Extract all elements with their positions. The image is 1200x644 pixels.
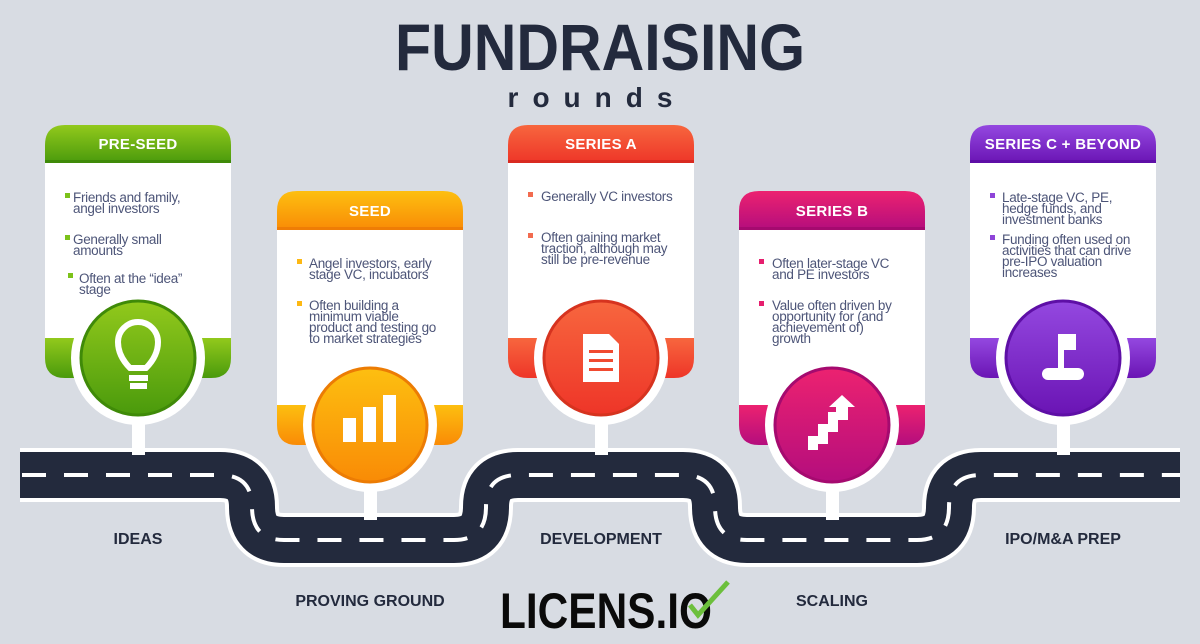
panel: series c + beyond: activities that can drive (1002, 243, 1131, 258)
panel: series a: traction, although may (541, 241, 668, 256)
panel: series c + beyond: Funding often used on (1002, 232, 1130, 247)
panel: series b: Value often driven by (772, 298, 892, 313)
stage labels (114, 531, 1121, 610)
panel: series c + beyond: investment banks (1002, 212, 1103, 227)
panel: series b: and PE investors (772, 267, 870, 282)
stage labels: DEVELOPMENT (540, 531, 662, 548)
icon: flag (1042, 334, 1084, 380)
logo: LICENS.IO (500, 583, 712, 639)
panel: pre-seed: amounts (73, 243, 123, 258)
stage labels: PROVING GROUND (295, 593, 445, 610)
panel: series b: achievement of) (772, 320, 864, 335)
panel: series c + beyond: Late-stage VC, PE, (1002, 190, 1112, 205)
panel: pre-seed: Generally small (73, 232, 162, 247)
icon: lightbulb (118, 322, 158, 386)
panel: seed: stage VC, incubators (309, 267, 429, 282)
panel: pre-seed: stage (79, 282, 111, 297)
panel: series a: Often gaining market (541, 230, 661, 245)
panel: series a (508, 125, 694, 455)
panel: pre-seed: angel investors (73, 201, 160, 216)
panel: series c + beyond: hedge funds, and (1002, 201, 1102, 216)
panel: pre-seed: Often at the “idea” (79, 271, 182, 286)
icon: stairs arrow (808, 395, 855, 450)
panel: series b: SERIES B (796, 203, 868, 220)
panel: seed: SEED (349, 203, 391, 220)
road (20, 475, 1180, 540)
title (395, 10, 805, 113)
icon: bar chart (343, 395, 396, 442)
panel: series a: SERIES A (565, 136, 637, 153)
stage labels: SCALING (796, 593, 868, 610)
panel: series a: still be pre-revenue (541, 252, 650, 267)
stage labels: IDEAS (114, 531, 163, 548)
panel: seed: minimum viable (309, 309, 399, 324)
panel: series b: growth (772, 331, 811, 346)
panel: seed: Angel investors, early (309, 256, 432, 271)
panel: series b (739, 191, 925, 520)
panel: series c + beyond: SERIES C + BEYOND (985, 136, 1141, 153)
panel: series a: Generally VC investors (541, 189, 673, 204)
panel: series b: Often later-stage VC (772, 256, 890, 271)
panel: seed: Often building a (309, 298, 400, 313)
panel: seed: product and testing go (309, 320, 436, 335)
panel: seed (277, 191, 463, 520)
panel: pre-seed (45, 125, 231, 455)
panel: series c + beyond (970, 125, 1156, 455)
panel: series c + beyond: pre-IPO valuation (1002, 254, 1102, 269)
panel: pre-seed: Friends and family, (73, 190, 180, 205)
panel: series c + beyond: increases (1002, 265, 1058, 280)
icon: document (583, 334, 619, 382)
title: FUNDRAISING (395, 10, 805, 84)
panel: seed: to market strategies (309, 331, 422, 346)
stage labels: IPO/M&A PREP (1005, 531, 1121, 548)
panel: series b: opportunity for (and (772, 309, 883, 324)
subtitle: rounds (508, 82, 686, 113)
panel: pre-seed: PRE-SEED (98, 136, 178, 153)
